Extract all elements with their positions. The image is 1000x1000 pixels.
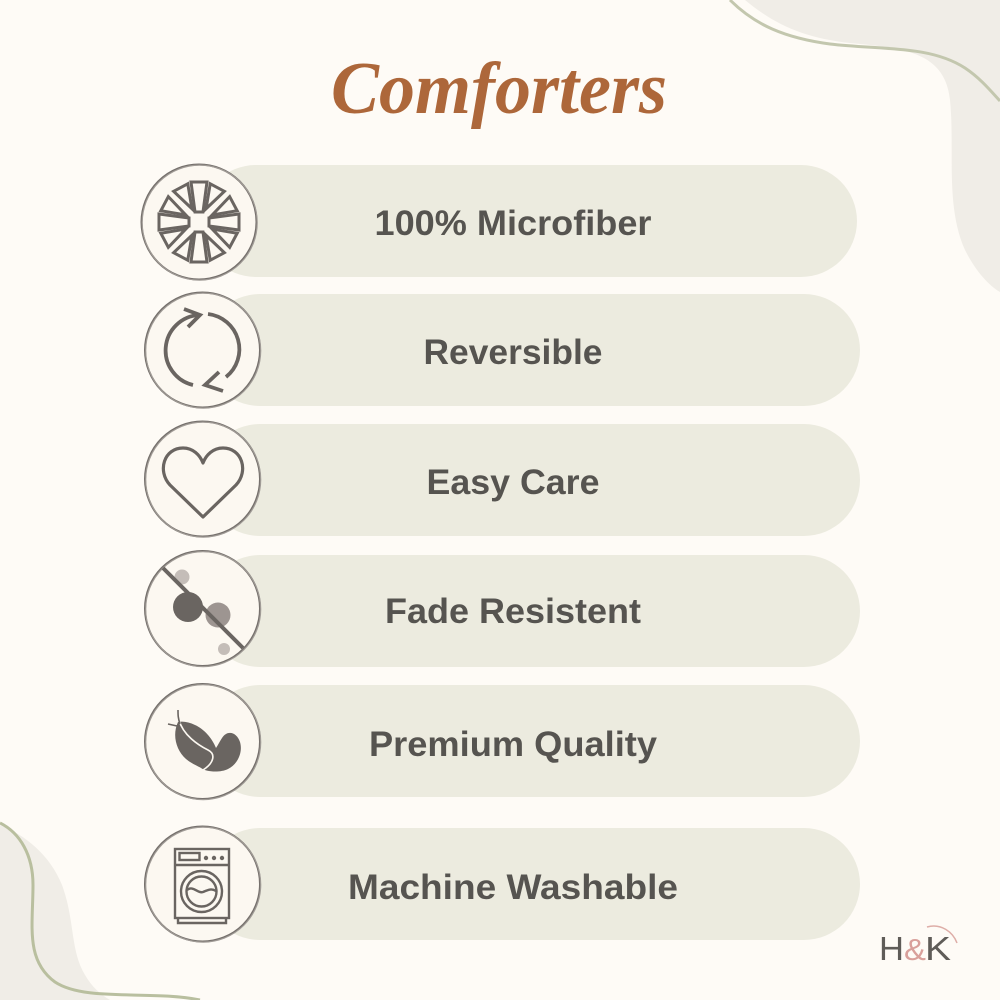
- row: Premium Quality: [145, 684, 860, 800]
- icon: fading dots with slash: [145, 551, 261, 667]
- row: Fade Resistent: [145, 551, 860, 667]
- logo: H&K: K: [925, 930, 951, 967]
- icon: washing machine: [145, 826, 261, 942]
- logo: H&K: &: [904, 932, 926, 967]
- title: Comforters: [331, 48, 667, 130]
- row: Reversible: [145, 292, 860, 408]
- pill: [204, 294, 860, 406]
- row: 100% Microfiber: [142, 164, 857, 280]
- icon: feather: [145, 684, 261, 800]
- logo: H&K: H: [879, 930, 904, 967]
- row: Easy Care: [145, 422, 860, 537]
- icon: reverse arrows: [145, 292, 261, 408]
- decoration: bottom left corner blob: [0, 823, 200, 1000]
- label: Fade Resistent: [385, 592, 641, 631]
- row: Machine Washable: [145, 826, 860, 942]
- label: Reversible: [424, 333, 602, 372]
- icon: radial fiber: [142, 164, 257, 280]
- pill: [204, 424, 860, 536]
- pill: [200, 165, 857, 277]
- decoration: top right corner blob: [730, 0, 1000, 292]
- pill: [204, 555, 860, 667]
- logo: H&K: [879, 926, 957, 967]
- label: Machine Washable: [348, 868, 678, 907]
- label: Easy Care: [426, 463, 600, 502]
- pill: [204, 828, 860, 940]
- icon: heart: [145, 422, 261, 537]
- pill: [204, 685, 860, 797]
- label: Premium Quality: [369, 725, 658, 764]
- label: 100% Microfiber: [374, 204, 652, 243]
